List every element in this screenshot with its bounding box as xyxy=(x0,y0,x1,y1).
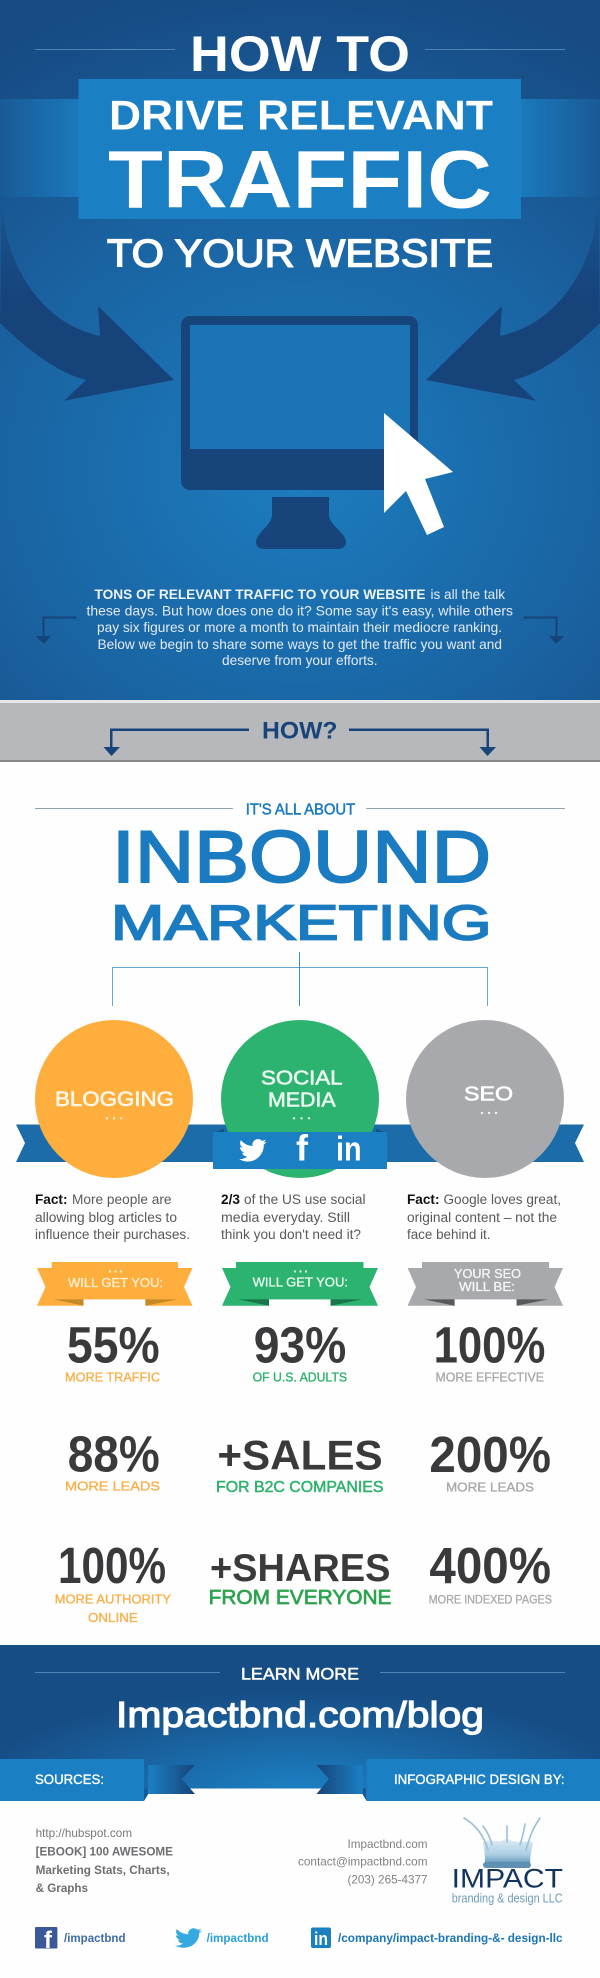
icon: linkedin: in xyxy=(336,1130,362,1168)
panel: learn more footer xyxy=(0,1645,600,1801)
social link: twitter: /impactbnd xyxy=(207,1931,269,1945)
dots xyxy=(481,1112,497,1114)
text block: contact details: (203) 265-4377 xyxy=(348,1873,428,1887)
label: sources: SOURCES: xyxy=(35,1772,104,1787)
intro paragraph xyxy=(86,586,513,668)
title: to your website: TO YOUR WEBSITE xyxy=(107,232,493,276)
label: WILL GET YOU: xyxy=(68,1276,163,1290)
ribbon: social will get you xyxy=(222,1262,378,1306)
arrow: small left xyxy=(36,616,76,644)
stat: 100 percent more effective: 100% xyxy=(434,1316,545,1374)
ribbon: sources xyxy=(0,1759,195,1801)
intro paragraph: these days. But how does one do it? Some say it's easy, while others xyxy=(86,602,513,618)
stat: 400 percent more indexed pages: MORE INDEXED PAGES xyxy=(429,1592,552,1606)
arrow: right branch xyxy=(349,728,496,756)
icon: twitter xyxy=(239,1139,267,1162)
stat: 93 percent of us adults: 93% xyxy=(254,1316,346,1374)
stat: plus shares from everyone xyxy=(209,1547,392,1609)
panel: hero header xyxy=(0,0,600,700)
social link: linkedin: in xyxy=(314,1929,328,1949)
icon: left curved arrow xyxy=(0,198,174,401)
label: will be: WILL BE: xyxy=(459,1280,515,1294)
heading: inbound: INBOUND xyxy=(112,817,491,898)
label: seo: SEO xyxy=(464,1082,513,1106)
logo tagline: branding & design LLC xyxy=(452,1892,563,1906)
text block: blogging fact: More people are xyxy=(72,1192,172,1207)
text block: seo fact: Google loves great, xyxy=(444,1192,561,1207)
arrow: small right xyxy=(524,616,564,644)
stat: plus shares from everyone: +SHARES xyxy=(210,1547,390,1590)
text block: social fact: of the US use social xyxy=(244,1192,366,1207)
stat: plus sales for b2c companies: FOR B2C COMPANIES xyxy=(216,1479,384,1496)
decorative title lines xyxy=(35,48,565,50)
heading: how: HOW? xyxy=(262,718,338,744)
stat: 100 percent more effective: MORE EFFECTIVE xyxy=(436,1369,544,1384)
stat: plus shares from everyone: FROM EVERYONE xyxy=(209,1586,392,1609)
text block: social fact: think you don't need it? xyxy=(221,1227,361,1242)
intro paragraph: deserve from your efforts. xyxy=(222,652,378,668)
label: infographic design by: INFOGRAPHIC DESIGN BY: xyxy=(394,1772,564,1787)
ribbon: blogging will get you xyxy=(37,1262,192,1306)
label: your seo: YOUR SEO xyxy=(454,1267,521,1281)
social link: linkedin: /company/impact-branding-&- design-llc xyxy=(338,1931,563,1945)
stat: 100 percent more authority online xyxy=(55,1537,171,1625)
heading: marketing: MARKETING xyxy=(111,896,492,950)
text block: sources list: [EBOOK] 100 AWESOME xyxy=(36,1845,173,1859)
stat: 55 percent more traffic: 55% xyxy=(67,1316,160,1374)
icon: computer monitor xyxy=(181,316,418,549)
panel: how band xyxy=(0,700,600,762)
link: blog url: Impactbnd.com/blog xyxy=(116,1694,484,1735)
stat: 100 percent more authority online: MORE AUTHORITY xyxy=(55,1592,171,1606)
stat: 88 percent more leads: 88% xyxy=(68,1426,160,1482)
title: traffic: TRAFFIC xyxy=(108,134,492,226)
text block: social fact: 2/3 xyxy=(221,1192,240,1207)
intro paragraph: pay six figures or more a month to maintain their mediocre ranking. xyxy=(97,619,502,635)
icon: right curved arrow xyxy=(426,198,600,401)
stat: 400 percent more indexed pages: 400% xyxy=(429,1537,551,1594)
heading: its all about: IT'S ALL ABOUT xyxy=(246,802,356,818)
arrow: left branch xyxy=(104,728,249,756)
label: WILL GET YOU: xyxy=(253,1276,348,1290)
title: drive relevant: DRIVE RELEVANT xyxy=(109,92,493,138)
social link: linkedin xyxy=(311,1928,563,1949)
dots xyxy=(293,1117,310,1120)
panel: seo circle xyxy=(406,1020,564,1178)
stat: 93 percent of us adults: OF U.S. ADULTS xyxy=(253,1369,347,1384)
stat: 88 percent more leads: MORE LEADS xyxy=(65,1479,160,1494)
text block: sources list: Marketing Stats, Charts, xyxy=(36,1863,170,1877)
text block: seo fact: original content – not the xyxy=(407,1210,557,1225)
stat: plus sales for b2c companies: +SALES xyxy=(217,1432,383,1478)
social link: facebook: /impactbnd xyxy=(64,1931,126,1945)
social link: twitter xyxy=(175,1928,269,1948)
text block: contact details: Impactbnd.com xyxy=(348,1837,428,1851)
icon: facebook: f xyxy=(296,1128,309,1168)
heading: learn more: LEARN MORE xyxy=(241,1666,359,1684)
icon: mouse cursor xyxy=(384,413,453,535)
ribbon: infographic design by xyxy=(316,1759,600,1801)
ribbon band behind circles xyxy=(16,1124,584,1162)
text block: blogging fact xyxy=(35,1192,190,1242)
dots xyxy=(106,1117,122,1120)
connector tree xyxy=(112,952,488,1006)
label: blogging: BLOGGING xyxy=(55,1088,174,1111)
text block: sources list: http://hubspot.com xyxy=(36,1826,132,1840)
stat: 100 percent more authority online: 100% xyxy=(58,1537,166,1594)
intro paragraph: Below we begin to share some ways to get the traffic you want and xyxy=(98,636,502,652)
label: social: SOCIAL xyxy=(261,1067,342,1090)
text block: sources list xyxy=(36,1826,173,1895)
text block: seo fact: face behind it. xyxy=(407,1227,490,1242)
text block: seo fact xyxy=(407,1192,561,1242)
label: media: MEDIA xyxy=(268,1089,336,1112)
stat: 200 percent more leads: MORE LEADS xyxy=(446,1480,534,1494)
text block: contact details: contact@impactbnd.com xyxy=(298,1854,428,1868)
intro paragraph: is all the talk xyxy=(430,586,506,602)
logo: impact branding and design xyxy=(452,1818,563,1906)
title: how to: HOW TO xyxy=(190,26,410,82)
text block: seo fact: Fact: xyxy=(407,1192,440,1207)
stat: 200 percent more leads: 200% xyxy=(429,1426,551,1483)
ribbon: your seo will be xyxy=(408,1262,563,1306)
text block: social fact xyxy=(221,1192,366,1242)
intro paragraph: TONS OF RELEVANT TRAFFIC TO YOUR WEBSITE xyxy=(94,586,426,602)
panel: inbound marketing heading xyxy=(35,802,565,1006)
panel: social media circle xyxy=(213,1020,387,1178)
text block: blogging fact: influence their purchases. xyxy=(35,1227,190,1242)
title box xyxy=(78,79,521,219)
text block: blogging fact: Fact: xyxy=(35,1192,68,1207)
social link: facebook xyxy=(35,1927,126,1954)
stat: 55 percent more traffic: MORE TRAFFIC xyxy=(65,1369,160,1384)
text block: contact details xyxy=(298,1837,428,1887)
text block: sources list: & Graphs xyxy=(36,1881,88,1895)
icon: water splash crown xyxy=(464,1818,540,1868)
social icon bar xyxy=(213,1128,387,1169)
panel: blogging circle xyxy=(35,1020,193,1178)
logo wordmark: IMPACT xyxy=(452,1864,563,1894)
stat: 100 percent more authority online: ONLINE xyxy=(88,1610,138,1625)
text block: blogging fact: allowing blog articles to xyxy=(35,1210,177,1225)
social link: facebook: f xyxy=(44,1927,53,1954)
text block: social fact: media everyday. Still xyxy=(221,1210,350,1225)
